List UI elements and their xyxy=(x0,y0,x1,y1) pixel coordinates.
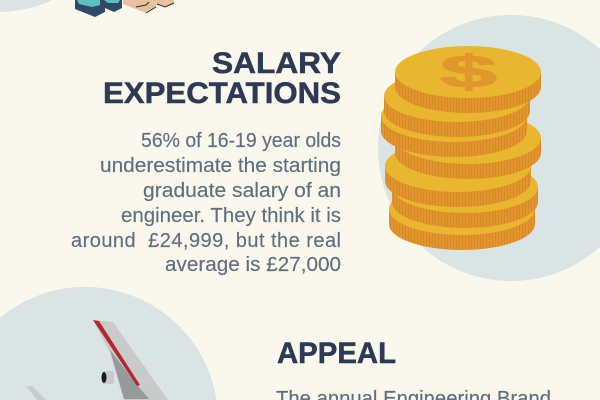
panel: salary expectations circle xyxy=(378,15,600,281)
heading: salary expectations xyxy=(103,47,341,110)
text block: salary body xyxy=(71,130,341,276)
text block: salary body: underestimate the starting xyxy=(100,155,341,177)
heading: appeal: APPEAL xyxy=(277,337,396,370)
heading: salary expectations: SALARY xyxy=(212,47,341,80)
text block: salary body: around £24,999, but the real xyxy=(71,230,341,252)
top illustration: partial circle and shoes xyxy=(0,0,174,17)
icon: aeroplane wings xyxy=(26,320,168,400)
heading: salary expectations: EXPECTATIONS xyxy=(103,77,341,110)
panel: appeal circle xyxy=(0,287,218,400)
text block: salary body: 56% of 16-19 year olds xyxy=(141,130,341,152)
icon: stack of gold coins xyxy=(381,46,541,250)
text block: salary body: average is £27,000 xyxy=(165,254,341,276)
text block: salary body: engineer. They think it is xyxy=(121,205,341,227)
icon: dollar sign: $ xyxy=(440,46,497,97)
text block: salary body: graduate salary of an xyxy=(143,180,341,202)
